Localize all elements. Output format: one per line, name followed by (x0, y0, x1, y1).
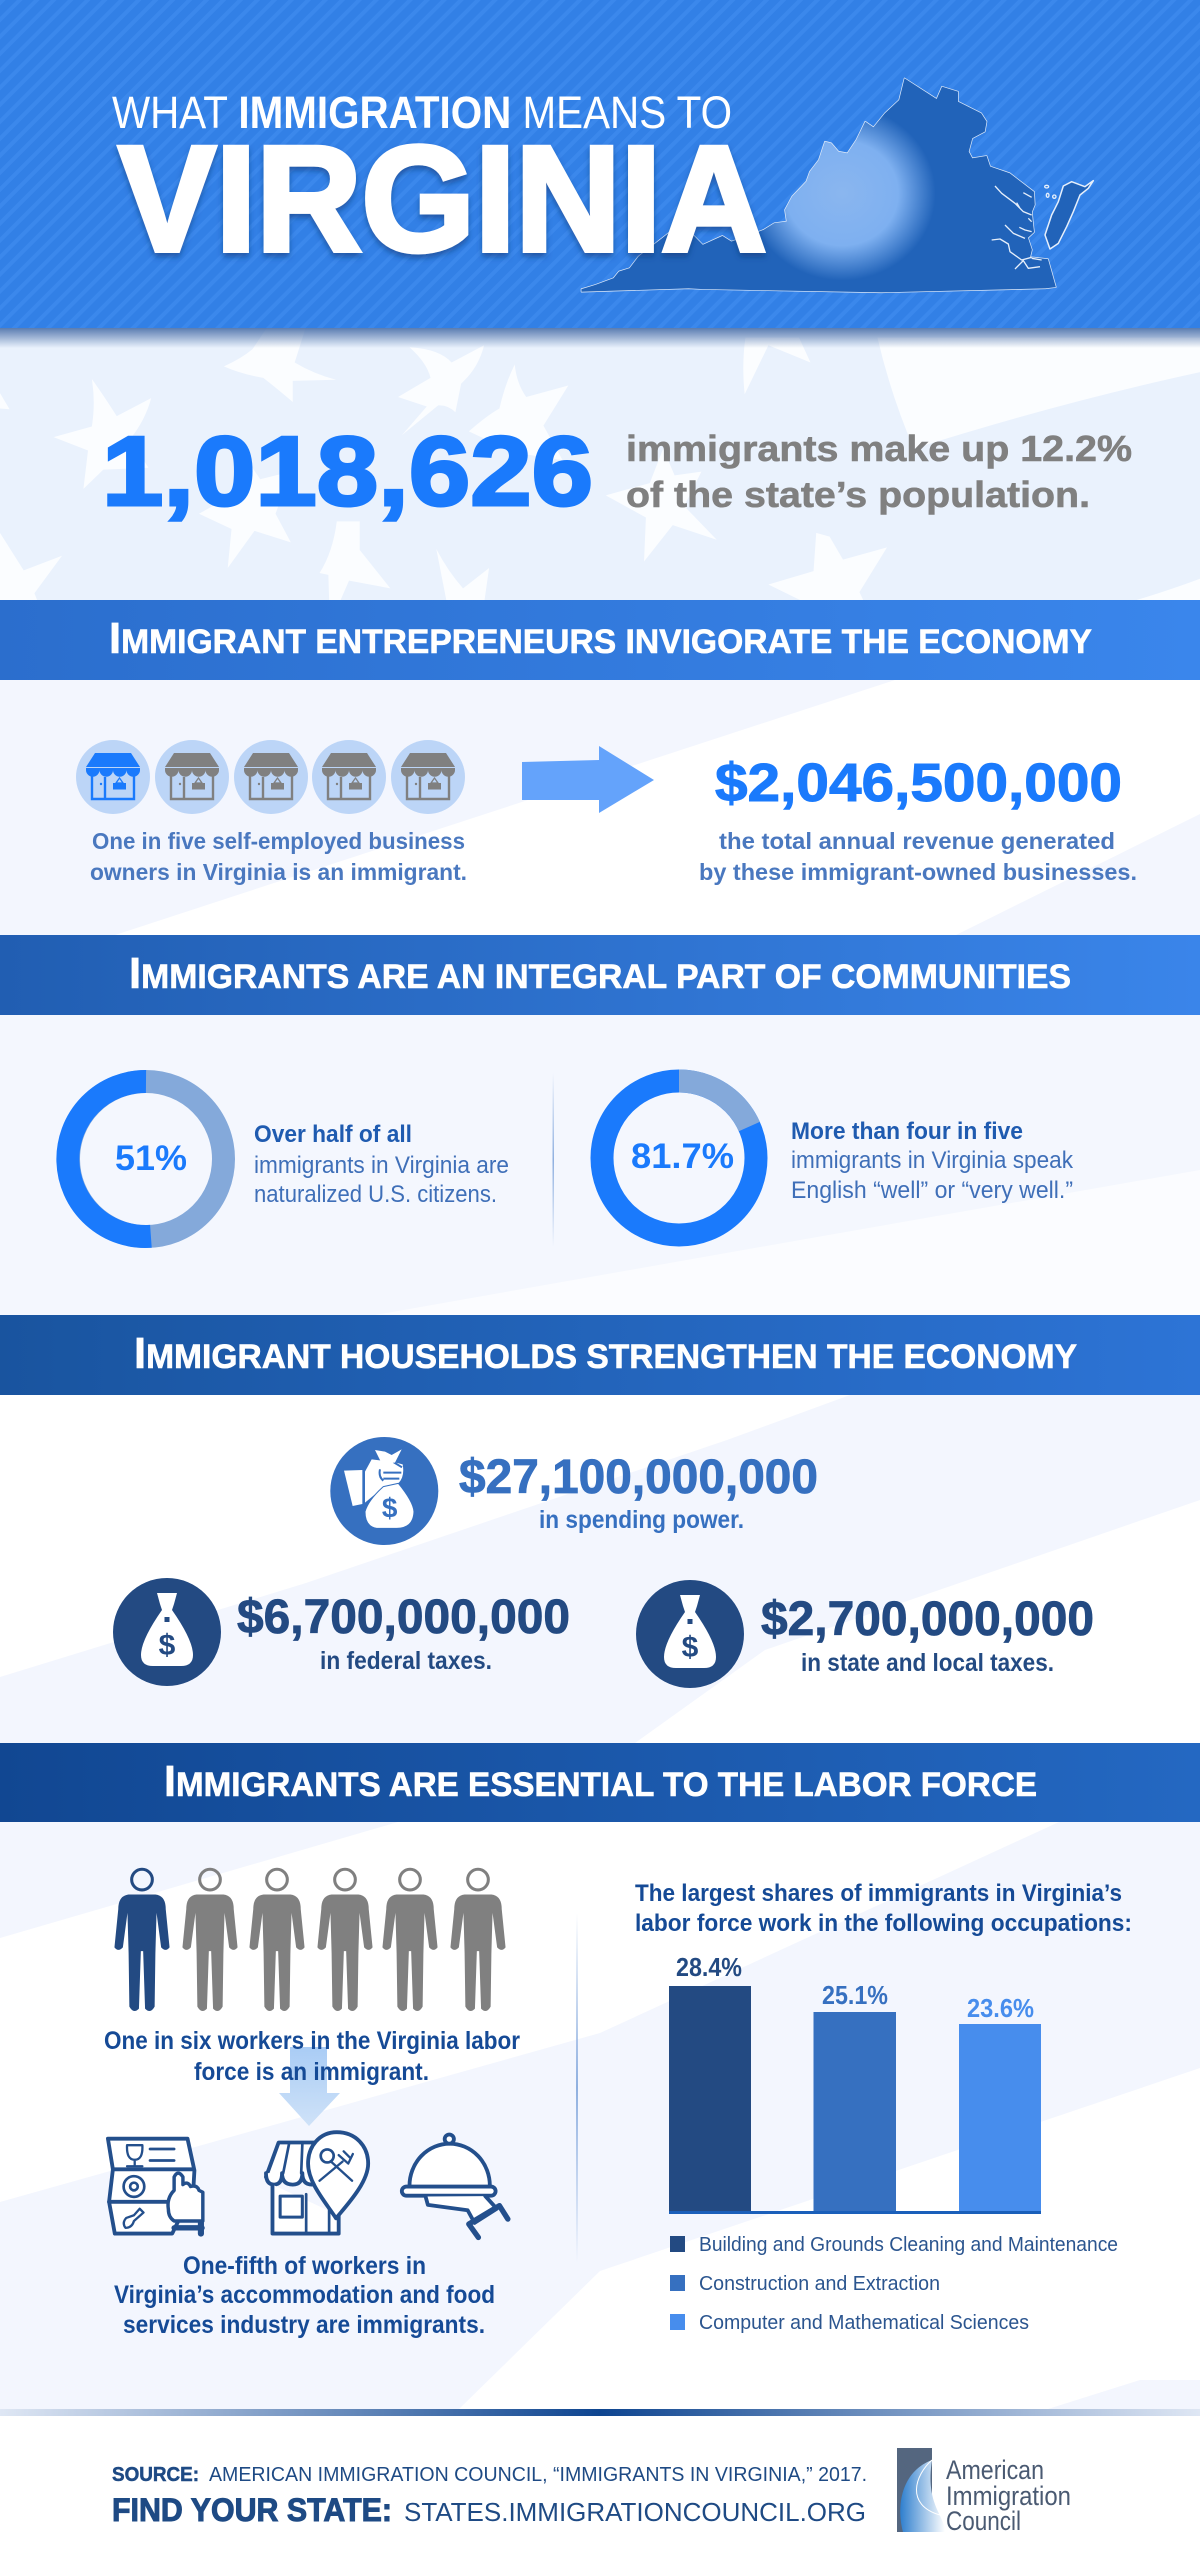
section banner: communities (0, 935, 1200, 1015)
icon: hand holding money bag: $ (382, 1492, 398, 1523)
find your state line: FIND YOUR STATE: (112, 2492, 392, 2528)
icon: hand holding money bag (330, 1437, 438, 1545)
logo: Immigration (946, 2481, 1071, 2511)
source line: AMERICAN IMMIGRATION COUNCIL, “IMMIGRANTS IN VIRGINIA,” 2017. (209, 2464, 867, 2486)
accommodation caption (114, 2252, 495, 2339)
state and local taxes figure: $2,700,000,000 (761, 1593, 1094, 1646)
citizens text: immigrants in Virginia are (254, 1152, 509, 1179)
self-employed caption: owners in Virginia is an immigrant. (90, 859, 467, 885)
arrow: down (279, 2047, 340, 2126)
citizens text: Over half of all (254, 1121, 412, 1148)
workers caption: force is an immigrant. (194, 2058, 429, 2086)
English text: English “well” or “very well.” (791, 1177, 1073, 1204)
section banner: communities: IMMIGRANTS ARE AN INTEGRAL PART OF COMMUNITIES (129, 949, 1071, 998)
revenue caption: by these immigrant-owned businesses. (699, 859, 1137, 885)
federal taxes figure (237, 1591, 570, 1675)
logo: American (946, 2455, 1044, 2485)
logo (897, 2448, 1071, 2536)
spending figure (459, 1451, 818, 1534)
panel: households (113, 1437, 1094, 1688)
legend (670, 2234, 1118, 2334)
title line 1: WHAT IMMIGRATION MEANS TO (112, 87, 732, 138)
workers caption (104, 2027, 520, 2086)
chart heading (635, 1880, 1132, 1937)
donut chart: 51 percent (68, 1081, 224, 1236)
chart heading: labor force work in the following occupations: (635, 1910, 1132, 1937)
bar chart (669, 1952, 1041, 2214)
bar chart: 23.6% (967, 1993, 1034, 2023)
flag stars background, left (0, 326, 586, 640)
spending figure: $27,100,000,000 (459, 1451, 818, 1504)
icon: restaurant location (266, 2132, 368, 2234)
arrow (522, 746, 654, 813)
divider (552, 1073, 554, 1247)
legend: Computer and Mathematical Sciences (699, 2312, 1029, 2334)
English text (791, 1118, 1074, 1204)
donut chart: 81.7 percent: 81.7% (631, 1137, 734, 1176)
find your state line: STATES.IMMIGRATIONCOUNCIL.ORG (404, 2497, 866, 2527)
icon: money bag, state: $ (682, 1631, 699, 1664)
legend: Building and Grounds Cleaning and Maintenance (699, 2234, 1118, 2256)
state and local taxes figure: in state and local taxes. (801, 1649, 1054, 1677)
statistic: immigrant population (102, 416, 1132, 526)
header banner (0, 0, 1200, 348)
citizens text: naturalized U.S. citizens. (254, 1181, 497, 1208)
workers caption: One in six workers in the Virginia labor (104, 2027, 520, 2055)
donut chart: 81.7 percent (602, 1081, 756, 1235)
panel: labor force left (104, 1869, 520, 2339)
logo: Council (946, 2506, 1021, 2536)
icon: menu (108, 2139, 203, 2234)
federal taxes figure: in federal taxes. (320, 1647, 492, 1675)
section banner: labor force (0, 1743, 1200, 1822)
population caption: immigrants make up 12.2% (626, 428, 1132, 469)
flag stars and stripes background, right (606, 338, 1200, 640)
find your state line (112, 2492, 866, 2528)
self-employed caption (90, 828, 467, 885)
divider (576, 1913, 578, 2263)
panel: entrepreneurs (76, 740, 1137, 885)
section banner: entrepreneurs (0, 600, 1200, 680)
section banner: households: IMMIGRANT HOUSEHOLDS STRENGTHEN THE ECONOMY (134, 1329, 1077, 1378)
title (112, 87, 766, 282)
revenue caption: the total annual revenue generated (719, 828, 1115, 854)
icon: money bag, state (636, 1580, 744, 1688)
panel: labor force chart (635, 1880, 1132, 2334)
icon: money bag, federal (113, 1578, 221, 1686)
panel: communities (68, 1073, 1074, 1247)
chart heading: The largest shares of immigrants in Virginia’s (635, 1880, 1122, 1907)
section banner: entrepreneurs: IMMIGRANT ENTREPRENEURS INVIGORATE THE ECONOMY (109, 614, 1092, 663)
icon: serving cloche (402, 2134, 508, 2237)
bar chart: 28.4% (676, 1952, 742, 1982)
icons: five stores (76, 740, 465, 814)
accommodation caption: Virginia’s accommodation and food (114, 2281, 495, 2309)
English text: More than four in five (791, 1118, 1023, 1145)
source line: SOURCE: (112, 2464, 199, 2486)
revenue figure: $2,046,500,000 (715, 753, 1122, 813)
footer (0, 2409, 1200, 2566)
map of Virginia (581, 78, 1093, 292)
donut chart: 51 percent: 51% (115, 1139, 187, 1178)
icon: money bag, federal: $ (159, 1629, 176, 1662)
citizens text (254, 1121, 509, 1208)
bar chart: 25.1% (822, 1980, 888, 2010)
section banner: labor force: IMMIGRANTS ARE ESSENTIAL TO THE LABOR FORCE (164, 1757, 1037, 1806)
English text: immigrants in Virginia speak (791, 1147, 1074, 1174)
accommodation caption: One-fifth of workers in (183, 2252, 426, 2280)
section banner: households (0, 1315, 1200, 1395)
statistic: immigrant population: of the state’s population. (626, 474, 1090, 515)
revenue caption (699, 828, 1137, 885)
title line 2: VIRGINIA (118, 114, 766, 282)
legend: Construction and Extraction (699, 2273, 940, 2295)
spending figure: in spending power. (539, 1506, 744, 1534)
federal taxes figure: $6,700,000,000 (237, 1591, 570, 1644)
state and local taxes figure (761, 1593, 1094, 1677)
accommodation caption: services industry are immigrants. (123, 2311, 485, 2339)
big number: 1,018,626 (102, 416, 593, 526)
self-employed caption: One in five self-employed business (92, 828, 465, 854)
icons: six workers (114, 1869, 506, 2011)
